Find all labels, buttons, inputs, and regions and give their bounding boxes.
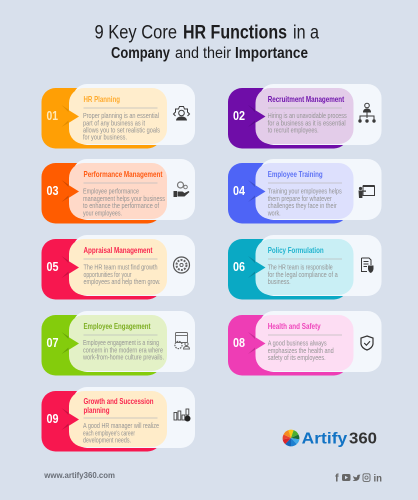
social icons <box>335 473 382 485</box>
panel: 09 Growth and Succession planning: each employee's career <box>83 428 135 438</box>
panel: 02 Recruitment Management: for a business as it is essential <box>268 118 346 127</box>
panel: 08 Health and Safety: A good business always <box>268 338 327 348</box>
panel: 08 Health and Safety: safety of its employees. <box>268 353 326 362</box>
logo: Artify360: Artify <box>302 430 347 447</box>
title <box>94 22 319 62</box>
panel: 01 HR Planning: part of any business as it <box>83 118 145 127</box>
panel: 07 Employee Engagement: work-from-home culture prevails. <box>82 352 164 362</box>
logo: Artify360 <box>283 430 377 447</box>
icon: hand with gear <box>174 182 190 197</box>
panel: 02 Recruitment Management <box>228 84 382 148</box>
panel: 03 Performance Management <box>42 159 195 224</box>
panel: 03 Performance Management: your employees. <box>83 208 122 218</box>
panel: 03 Performance Management: 03 <box>46 184 59 198</box>
icon: shield check <box>361 336 373 350</box>
panel: 03 Performance Management: management helps your business <box>83 194 165 203</box>
panel: 01 HR Planning <box>42 84 195 148</box>
panel: 06 Policy Formulation: business. <box>268 277 291 286</box>
panel: 04 Employee Training: them prepare for whatever <box>268 194 332 203</box>
website url: www.artify360.com <box>43 470 115 480</box>
panel: 08 Health and Safety: Health and Safety <box>268 321 321 331</box>
panel: 08 Health and Safety: emphasizes the health and <box>268 346 334 355</box>
panel: 07 Employee Engagement: Employee engagement is a rising <box>83 338 159 347</box>
title: 9 Key Core <box>94 22 177 44</box>
panel: 03 Performance Management: Performance Management <box>84 169 163 179</box>
panel: 01 HR Planning: for your business. <box>83 133 127 142</box>
panel: 05 Appraisal Management: The HR team must find growth <box>84 262 158 272</box>
panel: 06 Policy Formulation: The HR team is responsible <box>268 262 333 272</box>
panel: 04 Employee Training: 04 <box>233 184 245 198</box>
panel: 06 Policy Formulation: 06 <box>233 260 245 274</box>
panel: 02 Recruitment Management: to recruit employees. <box>268 126 319 134</box>
title: in a <box>293 22 319 44</box>
panel: 09 Growth and Succession planning: 09 <box>46 412 59 426</box>
title: Importance <box>235 45 308 62</box>
panel: 05 Appraisal Management: employees and help them grow. <box>84 277 160 286</box>
icon: bar chart with coin <box>174 409 190 422</box>
panel: 05 Appraisal Management: opportunities for your <box>84 270 132 279</box>
panel: 09 Growth and Succession planning: Growth and Succession <box>84 396 154 406</box>
panel: 01 HR Planning: allows you to set realistic goals <box>83 126 160 134</box>
panel: 05 Appraisal Management: 05 <box>46 260 59 274</box>
panel: 02 Recruitment Management: Recruitment Management <box>268 94 344 104</box>
panel: 07 Employee Engagement <box>42 311 195 376</box>
title: and their <box>175 45 231 62</box>
icon: wheel gear <box>174 257 190 273</box>
social icons: f <box>335 473 339 485</box>
panel: 06 Policy Formulation: for the legal compliance of a <box>268 270 338 279</box>
panel: 03 Performance Management: Employee performance <box>83 186 139 196</box>
panel: 06 Policy Formulation: Policy Formulation <box>268 245 324 255</box>
panel: 06 Policy Formulation <box>228 235 382 300</box>
icon: document with shield <box>362 258 374 273</box>
panel: 04 Employee Training <box>228 159 382 224</box>
panel: 09 Growth and Succession planning: development needs. <box>83 436 131 444</box>
social icons: in <box>374 473 382 484</box>
panel: 08 Health and Safety: 08 <box>233 336 245 350</box>
logo: Artify360: 360 <box>349 430 377 447</box>
panel: 01 HR Planning: HR Planning <box>84 94 120 104</box>
panel: 04 Employee Training: Training your employees helps <box>268 186 342 196</box>
panel: 04 Employee Training: work. <box>267 208 281 218</box>
panel: 02 Recruitment Management: 02 <box>233 109 245 123</box>
panel: 02 Recruitment Management: Hiring is an unavoidable process <box>268 111 347 120</box>
panel: 09 Growth and Succession planning: planning <box>84 405 110 415</box>
title: Company <box>111 45 170 62</box>
panel: 05 Appraisal Management: Appraisal Management <box>84 245 153 255</box>
panel: 01 HR Planning: 01 <box>46 109 58 123</box>
panel: 05 Appraisal Management <box>42 235 195 300</box>
panel: 07 Employee Engagement: Employee Engagement <box>84 321 151 331</box>
panel: 04 Employee Training: challenges they face in their <box>268 201 337 210</box>
panel: 09 Growth and Succession planning: A good HR manager will realize <box>83 421 159 430</box>
panel: 09 Growth and Succession planning <box>42 387 195 452</box>
icon: gear with person <box>174 106 190 120</box>
icon: org chart <box>358 103 376 123</box>
panel: 01 HR Planning: Proper planning is an essential <box>83 111 159 120</box>
icon: calendar with gear <box>175 332 190 349</box>
panel: 08 Health and Safety <box>228 311 382 376</box>
icon: trainer at board <box>358 185 374 198</box>
panel: 07 Employee Engagement: 07 <box>46 336 59 350</box>
title: HR Functions <box>183 22 287 44</box>
panel: 04 Employee Training: Employee Training <box>268 169 323 179</box>
icon: colourful wheel <box>283 430 299 446</box>
panel: 07 Employee Engagement: concern in the modern era where <box>83 345 163 354</box>
panel: 03 Performance Management: to enhance the performance of <box>83 201 160 210</box>
